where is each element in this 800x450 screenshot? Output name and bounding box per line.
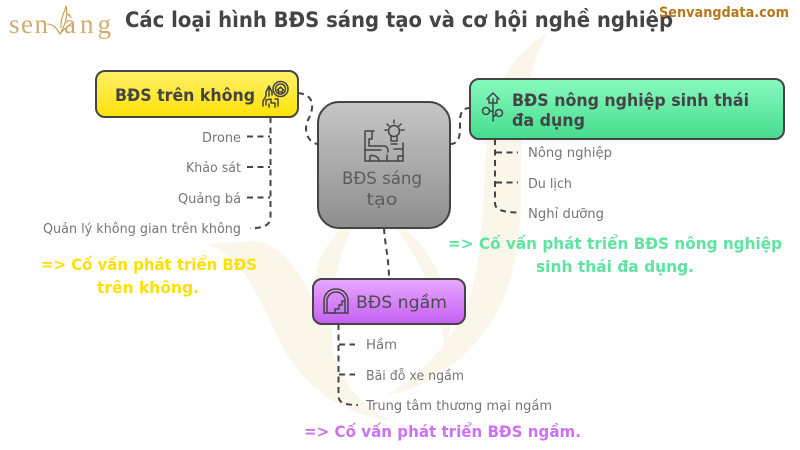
item: Du lịch: Du lịch xyxy=(528,176,572,192)
callout: eco-agriculture: => Cố vấn phát triển BĐS nông nghiệp xyxy=(448,234,782,253)
item: Khảo sát: Khảo sát xyxy=(186,160,241,176)
item: Quản lý không gian trên không: Quản lý không gian trên không xyxy=(43,221,241,237)
item: Hầm: Hầm xyxy=(366,337,397,353)
callout: aerial: => Cố vấn phát triển BĐS xyxy=(41,255,257,274)
callout: underground: => Cố vấn phát triển BĐS ngầm. xyxy=(304,422,581,441)
item: Bãi đỗ xe ngầm: Bãi đỗ xe ngầm xyxy=(366,367,464,384)
watermark: lotus logo xyxy=(208,33,547,421)
title: Các loại hình BĐS sáng tạo và cơ hội nghề nghiệp xyxy=(125,8,673,32)
connector: center to aerial xyxy=(298,93,318,144)
icon: building with home pin xyxy=(263,82,288,107)
item: Nông nghiệp: Nông nghiệp xyxy=(528,145,612,161)
logo: Sen Vàng xyxy=(9,6,111,39)
callout: eco-agriculture: sinh thái đa dụng. xyxy=(536,257,694,276)
logo: Sen Vàng: sen xyxy=(9,9,48,39)
branches: eco-agriculture xyxy=(495,139,612,222)
label: BĐS sáng tạo: BĐS sáng xyxy=(342,169,422,189)
heading: underground: BĐS ngầm xyxy=(356,292,447,313)
label: BĐS sáng tạo xyxy=(342,169,422,210)
item: Drone: Drone xyxy=(202,130,241,146)
icon: trees xyxy=(482,93,502,121)
heading: aerial: BĐS trên không xyxy=(115,86,255,106)
callout: eco-agriculture xyxy=(448,234,782,276)
callout: aerial xyxy=(41,255,257,297)
icon: floor plan with light bulb xyxy=(365,120,404,161)
panel: underground real estate xyxy=(313,279,465,324)
heading: eco-agriculture: BĐS nông nghiệp sinh thái xyxy=(512,91,749,111)
item: Trung tâm thương mại ngầm: Trung tâm thương mại ngầm xyxy=(365,398,552,414)
logo: Sen Vàng: àng xyxy=(64,9,111,39)
connector: center to agriculture xyxy=(450,108,470,144)
heading: eco-agriculture: đa dụng xyxy=(512,111,585,131)
panel: aerial real estate xyxy=(96,71,298,117)
branches: aerial xyxy=(43,117,270,237)
label: BĐS sáng tạo: tạo xyxy=(366,190,398,210)
icon: tunnel with stairs xyxy=(324,289,348,313)
item: Quảng bá: Quảng bá xyxy=(178,191,241,207)
website label: Senvangdata.com xyxy=(659,5,789,21)
connector: center to underground xyxy=(384,228,389,278)
callout: aerial: trên không. xyxy=(97,278,199,297)
panel: eco-agriculture real estate xyxy=(470,79,784,139)
item: Nghỉ dưỡng: Nghỉ dưỡng xyxy=(528,206,604,222)
heading: eco-agriculture xyxy=(512,91,749,131)
branches: underground xyxy=(338,324,552,414)
panel: central topic xyxy=(318,102,450,228)
